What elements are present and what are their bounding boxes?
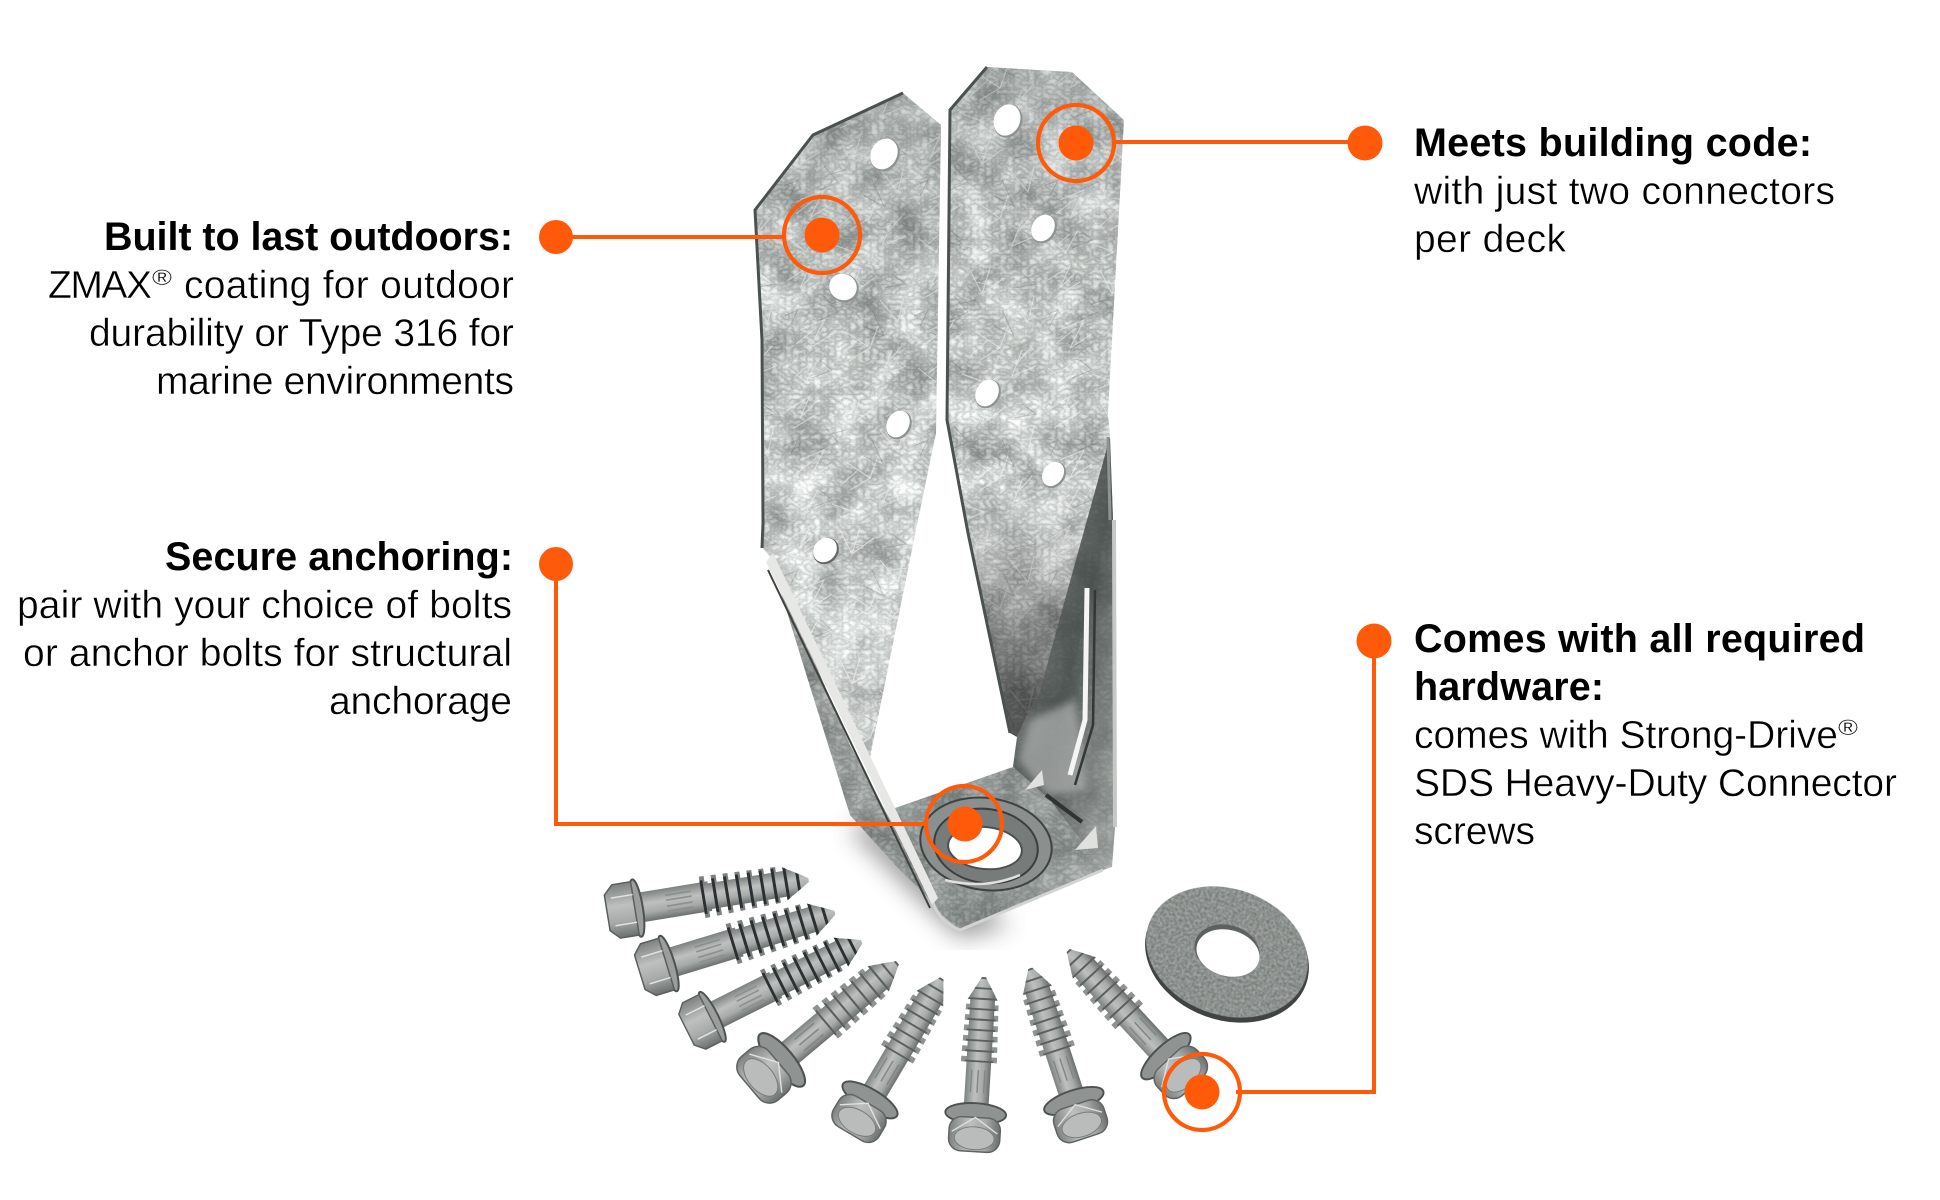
callout: comes with all required hardware	[1164, 617, 1897, 1130]
heading: Meets building code:	[1414, 121, 1812, 165]
body text: screws	[1414, 810, 1535, 853]
body text: SDS Heavy-Duty Connector	[1414, 762, 1897, 805]
body text: marine environments	[156, 360, 514, 403]
leader line and target	[1038, 105, 1382, 181]
body text: per deck	[1414, 218, 1566, 261]
body text: ZMAX	[48, 264, 152, 307]
leader line and target	[539, 547, 1002, 862]
body text	[1413, 170, 1835, 261]
body text	[48, 264, 514, 403]
body text: pair with your choice of bolts	[17, 584, 512, 627]
heading: Secure anchoring:	[165, 535, 513, 579]
callout: secure anchoring	[17, 535, 1002, 862]
body text: coating for outdoor	[184, 264, 514, 307]
long screw 5	[823, 961, 970, 1150]
heading continued: hardware:	[1414, 665, 1604, 709]
body text: or anchor bolts for structural	[23, 632, 512, 675]
heading: Comes with all required	[1414, 617, 1865, 661]
body text: durability or Type 316 for	[89, 312, 514, 355]
long screw 7	[1000, 957, 1115, 1147]
lag screw 1	[603, 851, 815, 942]
bracket: right gusset and side flange	[1013, 437, 1116, 870]
leader line and target	[539, 197, 860, 273]
body text: ®	[1838, 715, 1858, 740]
bracket: base plate with anchor hole	[895, 767, 1103, 930]
long screw 6	[943, 973, 1015, 1153]
body text	[1414, 714, 1897, 853]
bracket: left folded flange and edge	[766, 553, 1103, 930]
callout: built to last outdoors	[48, 197, 860, 403]
long screw 4	[728, 936, 921, 1113]
lag screw 3	[674, 916, 876, 1055]
lag screw 2	[631, 884, 845, 1000]
heading: Built to last outdoors:	[104, 215, 513, 259]
body text: comes with Strong-Drive	[1414, 714, 1838, 757]
body text	[17, 584, 512, 723]
bracket cast shadow	[850, 820, 1010, 938]
leader line and target	[1164, 624, 1392, 1130]
product illustration: bracket and hardware	[603, 67, 1328, 1153]
callout: meets building code	[1038, 105, 1835, 261]
flat washer	[1126, 864, 1328, 1045]
body text: with just two connectors	[1413, 170, 1835, 213]
bracket: right upright plate	[947, 67, 1124, 737]
bracket: left upright plate	[755, 93, 941, 757]
body text: ®	[152, 265, 172, 290]
body text: anchorage	[329, 680, 512, 723]
long screw 8	[1043, 927, 1217, 1107]
